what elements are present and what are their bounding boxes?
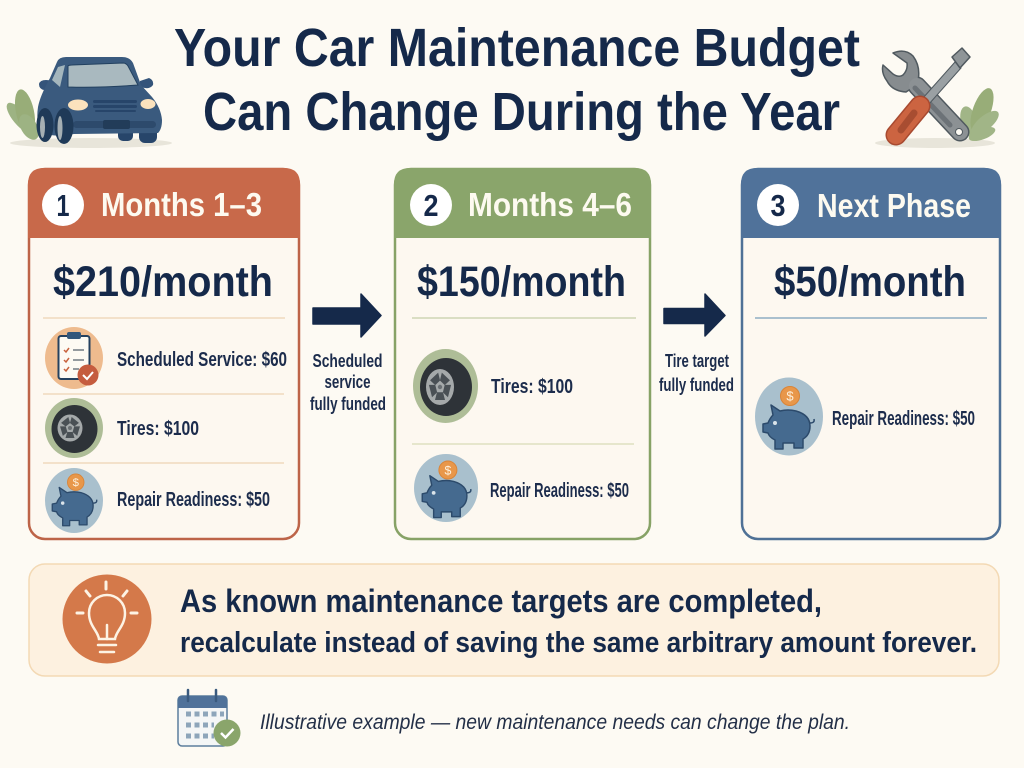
step badge 1: 1 [56, 188, 70, 223]
icon: checklist [45, 327, 103, 389]
caption: scheduled service fully funded [310, 351, 386, 414]
amount: $210/month: $210/month [53, 258, 273, 306]
heading: months 1-3: Months 1–3 [101, 186, 262, 223]
caption: scheduled service fully funded: fully funded [310, 394, 386, 414]
panel: months 4-6 [394, 168, 651, 539]
icon: piggy bank [755, 378, 823, 456]
arrow: second transition [664, 294, 725, 336]
callout: recalculate [29, 564, 999, 676]
card header: months 4-6 [394, 168, 651, 238]
icon: light bulb [62, 574, 152, 664]
step badge 3 [757, 184, 799, 226]
step badge 2: 2 [424, 188, 438, 223]
caption: scheduled service fully funded: Scheduled [312, 351, 382, 371]
arrow: first transition [313, 294, 381, 337]
label: repair readiness: Repair Readiness: $50 [117, 488, 270, 511]
label: tires: Tires: $100 [117, 417, 199, 440]
title [174, 18, 860, 142]
icon: calendar [178, 690, 240, 746]
icon: tire [45, 398, 103, 458]
step badge 3: 3 [770, 188, 786, 223]
title: Can Change During the Year [203, 82, 840, 142]
heading: next phase: Next Phase [817, 187, 971, 224]
footnote: Illustrative example — new maintenance needs can change the plan. [260, 711, 850, 734]
card header: months 1-3 [28, 168, 300, 238]
icon: piggy bank [45, 468, 103, 533]
step badge 2 [410, 184, 452, 226]
amount: $150/month: $150/month [417, 258, 626, 306]
callout text: As known maintenance targets are completed, [180, 583, 822, 619]
label: tires: Tires: $100 [491, 375, 573, 398]
icon: tire [413, 349, 478, 423]
icon: piggy bank: $ [73, 477, 80, 489]
icon: wrench and screwdriver [875, 48, 1003, 148]
title: Your Car Maintenance Budget [174, 18, 860, 78]
label: repair readiness: Repair Readiness: $50 [490, 479, 629, 502]
caption: scheduled service fully funded: service [324, 372, 370, 392]
panel: months 1-3 [28, 168, 300, 539]
icon: piggy bank [414, 454, 478, 522]
step badge 1 [42, 184, 84, 226]
amount: $50/month: $50/month [774, 258, 966, 306]
callout text [180, 583, 977, 659]
caption: tire target fully funded: fully funded [659, 375, 734, 395]
panel: next phase [741, 168, 1001, 539]
card header: next phase [741, 168, 1001, 238]
icon: piggy bank: $ [786, 388, 794, 404]
label: scheduled service: Scheduled Service: $60 [117, 348, 287, 371]
icon: car [2, 57, 172, 148]
caption: tire target fully funded: Tire target [665, 351, 729, 371]
heading: months 4-6: Months 4–6 [468, 186, 632, 223]
caption: tire target fully funded [659, 351, 734, 395]
icon: piggy bank: $ [444, 463, 451, 477]
